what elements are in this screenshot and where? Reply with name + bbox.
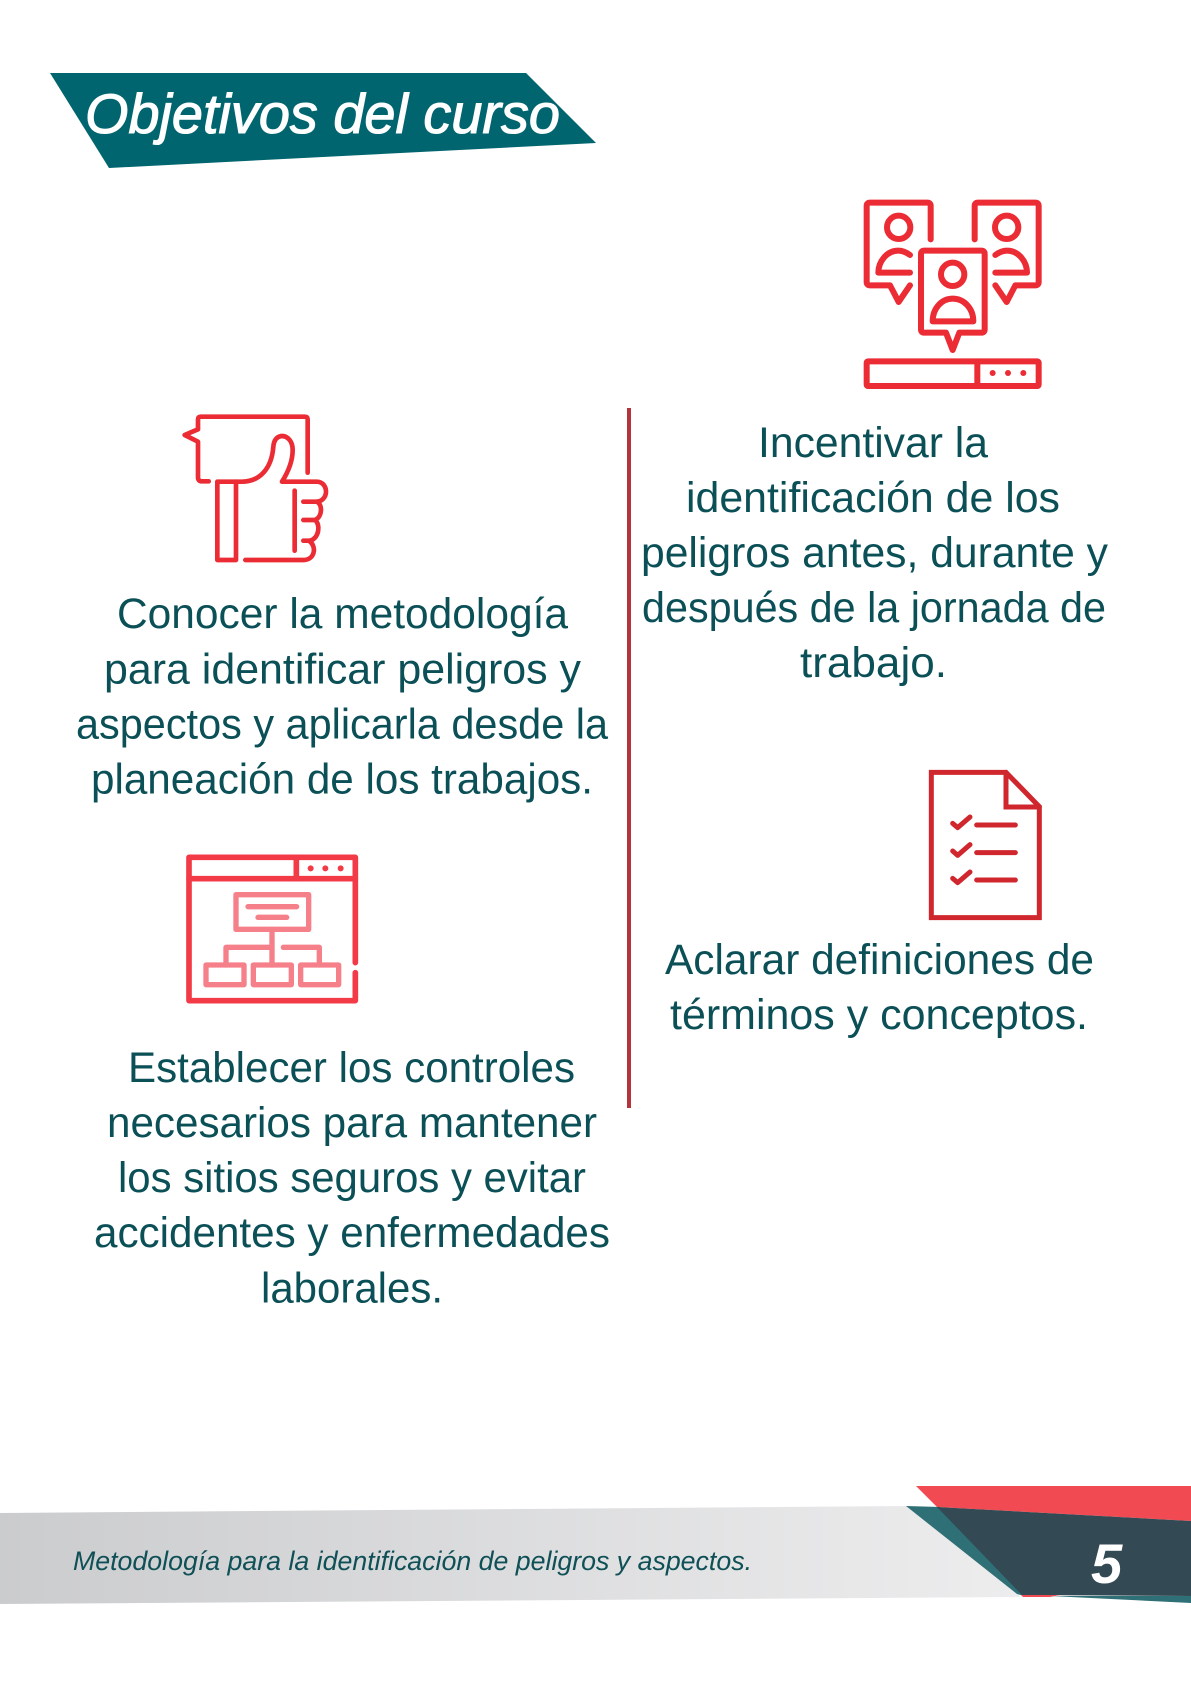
- text block: establecer los controles: [94, 1044, 610, 1312]
- text block: incentivar la identificación: Incentivar la: [758, 419, 988, 467]
- footer text: Metodología para la identificación de peligros y aspectos.: [73, 1546, 752, 1576]
- page number: 5: [1091, 1532, 1123, 1595]
- text block: incentivar la identificación: trabajo.: [800, 639, 947, 687]
- text block: establecer los controles: los sitios seguros y evitar: [118, 1154, 586, 1202]
- text block: conocer la metodología: aspectos y aplicarla desde la: [76, 700, 608, 748]
- text block: establecer los controles: accidentes y enfermedades: [94, 1209, 610, 1257]
- page number corner: [906, 1486, 1191, 1603]
- text block: conocer la metodología: planeación de los trabajos.: [91, 756, 593, 804]
- title banner: [50, 73, 596, 168]
- footer band: [0, 1506, 1020, 1604]
- text block: conocer la metodología: para identificar peligros y: [104, 646, 581, 694]
- text block: establecer los controles: Establecer los controles: [128, 1044, 575, 1092]
- icon: checklist document: [931, 772, 1039, 918]
- text block: incentivar la identificación: peligros antes, durante y: [641, 529, 1108, 577]
- icon: browser window with org chart: [189, 857, 355, 1001]
- text block: aclarar definiciones: Aclarar definiciones de: [665, 936, 1094, 984]
- text block: aclarar definiciones: términos y conceptos.: [670, 991, 1088, 1039]
- text block: establecer los controles: necesarios para mantener: [107, 1099, 597, 1147]
- vertical divider: [627, 408, 631, 1108]
- text block: aclarar definiciones: [665, 936, 1094, 1039]
- text block: establecer los controles: laborales.: [261, 1264, 443, 1312]
- text block: incentivar la identificación: identificación de los: [686, 474, 1060, 522]
- title: Objetivos del curso: [85, 82, 560, 145]
- text block: conocer la metodología: Conocer la metodología: [117, 590, 568, 638]
- text block: incentivar la identificación: [641, 419, 1108, 687]
- icon: three people location pins above a bar: [867, 203, 1039, 386]
- text block: conocer la metodología: [76, 590, 608, 804]
- text block: incentivar la identificación: después de la jornada de: [642, 584, 1106, 632]
- icon: thumbs up with speech bubble: [185, 417, 326, 560]
